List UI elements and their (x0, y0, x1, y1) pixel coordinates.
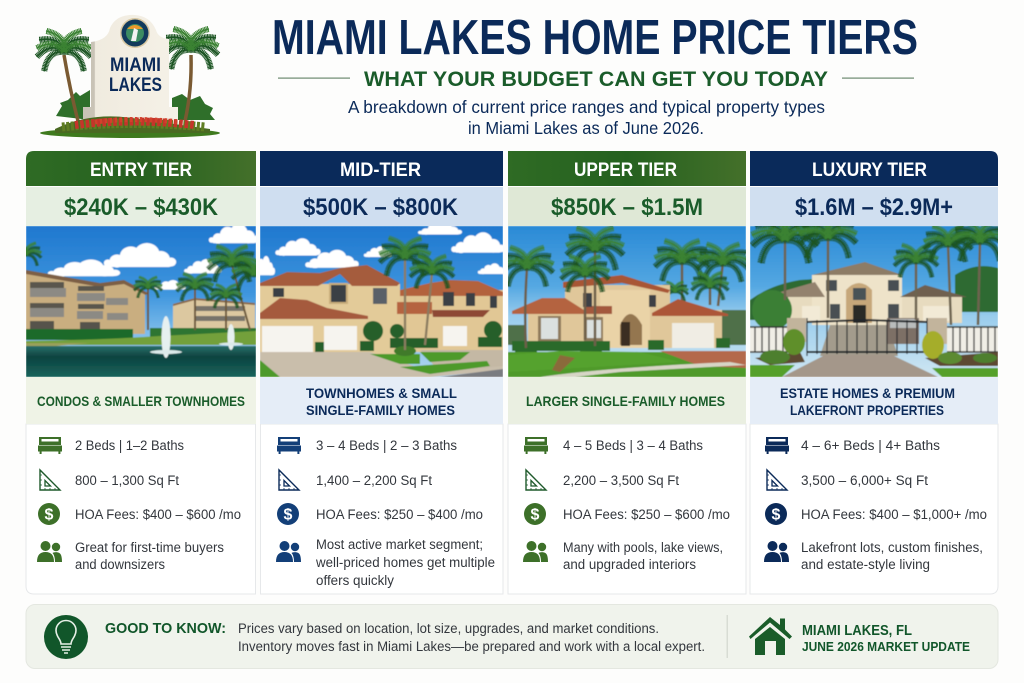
location text: MIAMI LAKES, FL (802, 623, 912, 639)
photo: townhomes (253, 222, 506, 377)
details list (37, 437, 241, 572)
property type (260, 377, 503, 424)
beds and baths: 2 Beds | 1–2 Baths (75, 438, 184, 453)
icon: bed (524, 437, 548, 454)
tier header: MID-TIER (340, 159, 421, 181)
buyer note (563, 540, 723, 572)
HOA fees: HOA Fees: $250 – $600 /mo (563, 507, 730, 522)
buyer note (75, 540, 224, 572)
seal (120, 18, 150, 48)
tier header (260, 151, 503, 186)
beds and baths: 4 – 6+ Beds | 4+ Baths (801, 438, 940, 453)
square feet: 1,400 – 2,200 Sq Ft (316, 473, 432, 488)
buyer note: and downsizers (75, 557, 165, 572)
price band: $500K – $800K (303, 194, 459, 221)
photo: gated estate home (750, 226, 998, 377)
icon: ruler (279, 470, 299, 490)
icon: dollar (277, 503, 299, 525)
beds and baths: 3 – 4 Beds | 2 – 3 Baths (316, 438, 457, 453)
description: A breakdown of current price ranges and typical property types (348, 97, 825, 117)
icon: ruler (40, 470, 60, 490)
location text: JUNE 2026 MARKET UPDATE (802, 639, 970, 654)
photo: large single-family home (500, 223, 749, 377)
tier header (26, 151, 256, 186)
HOA fees: HOA Fees: $400 – $600 /mo (75, 507, 241, 522)
icon: ruler (767, 470, 787, 490)
icon: ruler (526, 470, 546, 490)
panel: entry tier (26, 151, 256, 594)
property type (26, 377, 256, 424)
good to know text (238, 621, 705, 654)
icon: dollar (38, 503, 60, 525)
property type: CONDOS & SMALLER TOWNHOMES (37, 393, 245, 409)
icon: people (523, 541, 548, 562)
ground ellipse (40, 128, 220, 138)
good to know text: Inventory moves fast in Miami Lakes—be prepared and work with a local expert. (238, 639, 705, 654)
icon: light bulb (44, 615, 88, 659)
square feet: 3,500 – 6,000+ Sq Ft (801, 473, 928, 488)
panel body (750, 424, 998, 594)
property type: LAKEFRONT PROPERTIES (790, 402, 944, 418)
tier header (508, 151, 746, 186)
panel: mid-tier (253, 151, 506, 594)
buyer note (315, 537, 495, 588)
square feet: 2,200 – 3,500 Sq Ft (563, 473, 679, 488)
good to know heading: GOOD TO KNOW: (105, 620, 226, 637)
property type (508, 377, 746, 424)
price band (26, 187, 256, 226)
footer panel: good to know (26, 604, 998, 668)
monument stone (83, 15, 178, 124)
details list (276, 437, 495, 588)
square feet: 800 – 1,300 Sq Ft (75, 473, 179, 488)
property type: SINGLE-FAMILY HOMES (306, 402, 455, 418)
icon: people (276, 541, 301, 562)
details list (764, 437, 987, 572)
buyer note (801, 540, 983, 572)
price band (750, 187, 998, 226)
logo: Miami Lakes entrance sign: LAKES (109, 75, 162, 96)
icon: house (749, 617, 792, 655)
panel body (260, 424, 503, 594)
details list (523, 437, 730, 572)
footer background (26, 604, 998, 668)
property type: LARGER SINGLE-FAMILY HOMES (526, 393, 725, 409)
buyer note: offers quickly (316, 573, 394, 588)
buyer note: and upgraded interiors (563, 557, 696, 572)
price band (260, 187, 503, 226)
price band: $1.6M – $2.9M+ (795, 194, 953, 221)
left palm (37, 26, 91, 121)
icon: people (37, 541, 62, 562)
right palm (164, 24, 218, 121)
price band: $240K – $430K (64, 194, 219, 221)
buyer note: and estate-style living (801, 557, 930, 572)
tier header: LUXURY TIER (812, 159, 927, 181)
buyer note: Most active market segment; (316, 537, 483, 552)
description: in Miami Lakes as of June 2026. (468, 118, 704, 138)
location text (802, 623, 970, 654)
tier header: ENTRY TIER (90, 159, 192, 181)
tier header (750, 151, 998, 186)
buyer note: Great for first-time buyers (75, 540, 224, 555)
tier header: UPPER TIER (574, 159, 677, 181)
panel body (508, 424, 746, 594)
price band: $850K – $1.5M (551, 194, 703, 221)
icon: bed (277, 437, 301, 454)
panel: luxury tier (750, 151, 1007, 594)
right bush (172, 94, 215, 120)
panel: upper tier (500, 151, 749, 594)
buyer note: Lakefront lots, custom finishes, (801, 540, 983, 555)
price band (508, 187, 746, 226)
good to know text: Prices vary based on location, lot size, upgrades, and market conditions. (238, 621, 659, 636)
property type: TOWNHOMES & SMALL (306, 385, 457, 401)
description (348, 97, 825, 138)
sign text: MIAMI (110, 55, 161, 76)
beds and baths: 4 – 5 Beds | 3 – 4 Baths (563, 438, 703, 453)
HOA fees: HOA Fees: $400 – $1,000+ /mo (801, 507, 987, 522)
panel body (26, 424, 256, 594)
icon: dollar (524, 503, 546, 525)
photo: condos by lake with fountains (26, 226, 256, 377)
icon: bed (38, 437, 62, 454)
icon: dollar (765, 503, 787, 525)
icon: bed (765, 437, 789, 454)
left bush (56, 90, 90, 120)
subtitle with rules: WHAT YOUR BUDGET CAN GET YOU TODAY (364, 67, 828, 91)
buyer note: Many with pools, lake views, (563, 540, 723, 555)
icon: people (764, 541, 789, 562)
HOA fees: HOA Fees: $250 – $400 /mo (316, 507, 483, 522)
property type (750, 377, 998, 424)
property type: ESTATE HOMES & PREMIUM (780, 385, 955, 401)
flower bed (55, 116, 210, 133)
logo: Miami Lakes entrance sign (37, 15, 220, 138)
buyer note: well-priced homes get multiple (315, 555, 495, 570)
